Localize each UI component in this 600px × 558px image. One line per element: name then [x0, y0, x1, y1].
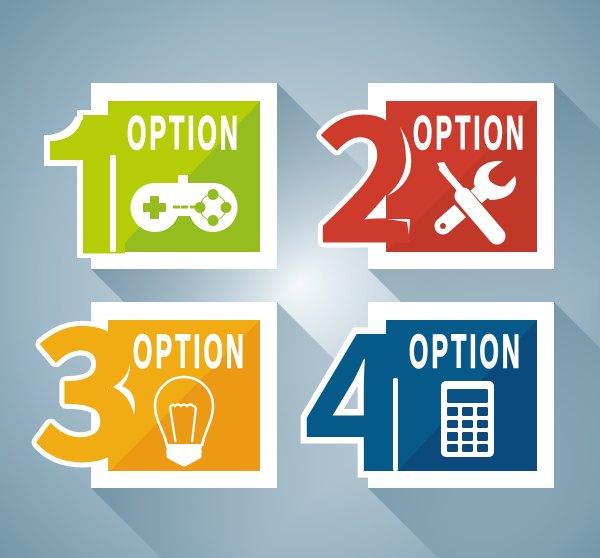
white crescent accent [113, 363, 135, 415]
panel 1 colour field [108, 101, 260, 252]
numeral 1: 1 [38, 35, 148, 306]
heading: option 3: OPTION [133, 324, 247, 378]
numeral 1 [50, 115, 125, 254]
heading: option 1: OPTION [127, 106, 241, 159]
icon: game controller [130, 175, 238, 232]
numeral 3: 3 [34, 253, 138, 509]
numeral 4: 4 [303, 252, 409, 526]
long shadow: panel 4 [368, 302, 600, 558]
icon: light bulb [155, 377, 213, 466]
numeral 2: 2 [317, 44, 417, 290]
panel 2 diagonal shade [386, 101, 537, 252]
white divider line [393, 378, 398, 471]
white crescent accent [387, 127, 411, 196]
icon: wrench and screwdriver [437, 161, 516, 236]
panel 2 white frame [368, 83, 554, 269]
panel: option 4 [303, 252, 554, 526]
white corner accent [387, 219, 410, 235]
panel 3 colour field [108, 320, 260, 471]
panel 2 colour field [386, 101, 537, 252]
long shadow: panel 3 [91, 302, 427, 558]
panel 1 diagonal shade [116, 101, 260, 252]
panel: option 3 [34, 253, 277, 509]
numeral 1 outline [44, 110, 91, 258]
panel 4 diagonal shade [398, 320, 537, 471]
white divider line [110, 155, 116, 252]
numeral 2 outline: 2 [317, 44, 417, 290]
panel 3 white frame [91, 302, 277, 488]
icon: calculator [441, 381, 494, 457]
long shadow: panel 2 [368, 83, 600, 419]
panel: option 1 [44, 83, 277, 269]
panel: option 2 [317, 44, 554, 290]
numeral 1 outline: 1 [38, 35, 148, 306]
panel 3 diagonal shade [110, 320, 260, 471]
long shadow: panel 1 [91, 83, 427, 419]
numeral 4 outline: 4 [303, 252, 409, 526]
panel 4 colour field [386, 320, 537, 471]
panel 1 white frame [91, 83, 277, 269]
panel 4 white frame [368, 302, 554, 488]
numeral 3 outline: 3 [34, 253, 138, 509]
